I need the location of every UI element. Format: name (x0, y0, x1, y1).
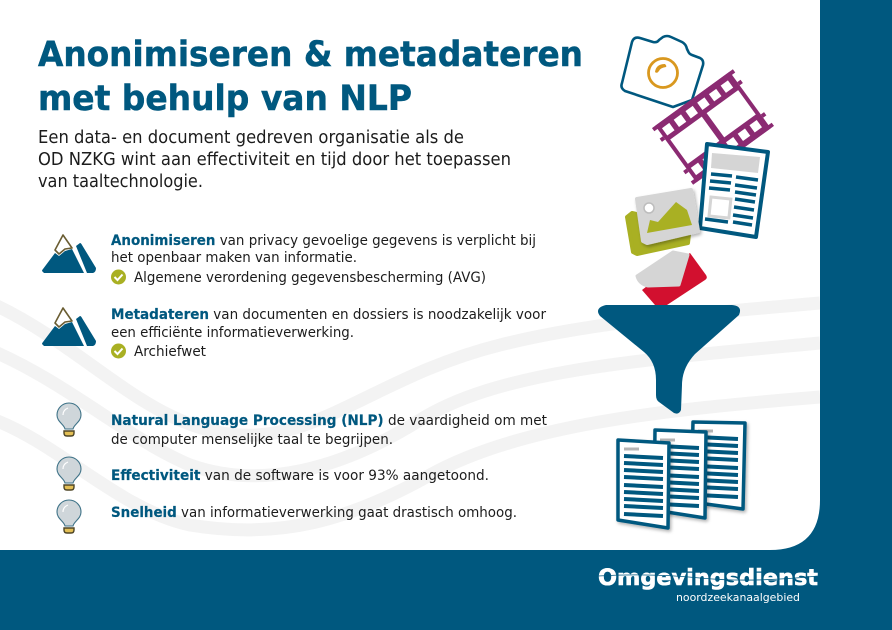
icon: picture stack (627, 190, 698, 254)
icon: mountain 1 (42, 235, 96, 273)
text: NLP: de computer menselijke taal te begrijpen. (111, 432, 393, 448)
icon: camera (621, 36, 703, 107)
logo: Omgevingsdienst (598, 566, 818, 591)
icon: newspaper document (700, 144, 768, 237)
text: Metadateren: een efficiënte informatieverwerking. (111, 325, 354, 341)
text: Metadateren (111, 307, 546, 341)
text: Anonimiseren: Anonimiseren van privacy gevoelige gegevens is verplicht bij (111, 233, 536, 249)
logo: noordzeekanaalgebied (676, 591, 800, 604)
icon: document front (618, 440, 669, 528)
icon: bulb 2 (57, 457, 81, 490)
text: Archiefwet: Archiefwet (134, 344, 206, 360)
icon: bulb 3 (57, 500, 81, 533)
title: Anonimiseren & metadateren (38, 35, 583, 75)
text: Metadateren: Metadateren van documenten en dossiers is noodzakelijk voor (111, 307, 546, 323)
icon: bulb 1 (57, 403, 81, 436)
text: Effectiviteit: Effectiviteit van de software is voor 93% aangetoond. (111, 468, 489, 484)
icon: check Archiefwet (111, 344, 126, 358)
title (38, 35, 583, 119)
title: met behulp van NLP (38, 79, 412, 119)
icon: document back (691, 422, 745, 509)
icon: document middle (654, 430, 706, 518)
text: NLP (111, 413, 547, 448)
icon: funnel (598, 305, 740, 414)
intro text: Een data- en document gedreven organisatie als de (38, 127, 464, 148)
text: NLP: Natural Language Processing (NLP) de vaardigheid om met (111, 413, 547, 429)
text: Snelheid: Snelheid van informatieverwerking gaat drastisch omhoog. (111, 505, 517, 521)
logo (598, 566, 818, 604)
icon: check AVG (111, 270, 126, 284)
icon: envelope (637, 252, 707, 305)
intro text (38, 127, 511, 192)
intro text: van taaltechnologie. (38, 171, 203, 192)
icon: mountain 2 (42, 308, 96, 346)
text: AVG: Algemene verordening gegevensbescherming (AVG) (134, 270, 486, 286)
text: Anonimiseren (111, 233, 536, 266)
icon: film strip (652, 69, 774, 185)
text: Anonimiseren: het openbaar maken van informatie. (111, 250, 357, 266)
intro text: OD NZKG wint aan effectiviteit en tijd door het toepassen (38, 149, 511, 170)
